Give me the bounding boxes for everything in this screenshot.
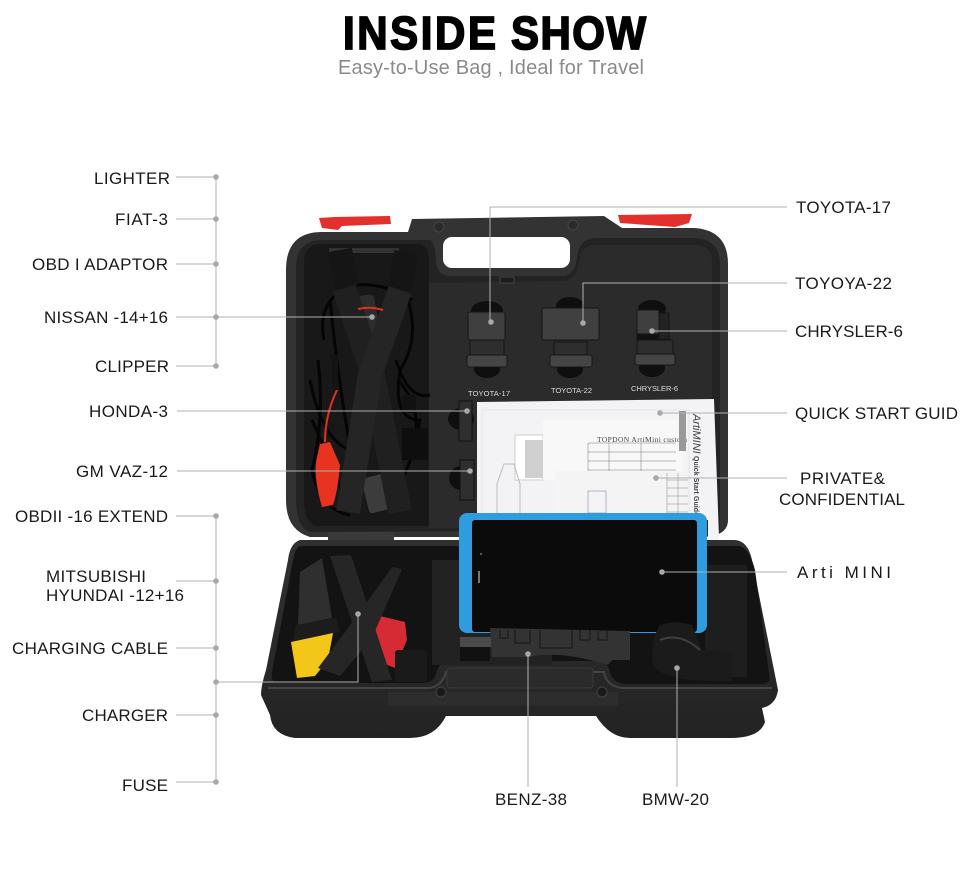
quick start guide paper: ArtiMINI (690, 413, 702, 454)
case lid (286, 214, 728, 570)
right labels: CONFIDENTIAL (779, 490, 905, 509)
red connector (372, 616, 407, 668)
adapter: gm vaz-12 (460, 460, 474, 500)
left labels (12, 169, 184, 795)
case base (261, 513, 778, 738)
right labels: CHRYSLER-6 (795, 322, 903, 341)
foam labels: TOYOTA-17 (468, 389, 510, 398)
left labels: CLIPPER (95, 357, 169, 376)
red latches (319, 216, 391, 230)
left labels: NISSAN -14+16 (44, 308, 168, 327)
adapter: chrysler-6 (635, 310, 675, 365)
toolkit case photo (261, 214, 778, 738)
foam labels: CHRYSLER-6 (631, 384, 678, 393)
cables (310, 285, 430, 515)
left labels: FIAT-3 (115, 210, 168, 229)
base straps (318, 555, 402, 682)
left labels: HONDA-3 (89, 402, 168, 421)
left labels: FUSE (122, 776, 168, 795)
adapter: toyota-22 (542, 308, 599, 367)
bottom labels: BENZ-38 (495, 790, 567, 809)
left labels: OBDII -16 EXTEND (15, 507, 168, 526)
yellow connector and cable (291, 558, 340, 678)
left labels: CHARGER (82, 706, 168, 725)
left labels: OBD I ADAPTOR (32, 255, 168, 274)
leader lines (176, 177, 787, 787)
title (343, 8, 646, 59)
quick start guide paper (477, 399, 720, 570)
tablet (459, 513, 707, 633)
velcro straps (340, 250, 406, 512)
right labels (779, 198, 958, 582)
left labels: HYUNDAI -12+16 (46, 586, 184, 605)
right labels: QUICK START GUID (795, 404, 958, 423)
bottom labels: BMW-20 (642, 790, 709, 809)
subtitle: Easy-to-Use Bag , Ideal for Travel (338, 57, 644, 79)
scanner handle (460, 628, 630, 665)
adapter: honda-3 (459, 401, 472, 441)
left labels: CHARGING CABLE (12, 639, 168, 658)
quick start guide paper: Quick Start Guide (692, 456, 699, 516)
left labels: GM VAZ-12 (76, 462, 168, 481)
left labels: LIGHTER (94, 169, 170, 188)
right labels: TOYOTA-17 (796, 198, 891, 217)
right labels: TOYOYA-22 (795, 274, 892, 293)
foam labels: TOYOTA-22 (551, 386, 592, 395)
right labels: Arti MINI (797, 563, 891, 582)
quick start guide paper: TOPDON ArtiMini custom (597, 435, 687, 444)
bmw adapter (652, 622, 732, 682)
foam labels (468, 384, 678, 398)
title: SHOW (511, 8, 646, 59)
adapter: toyota-17 (467, 312, 507, 367)
title: INSIDE (343, 8, 496, 59)
left labels: MITSUBISHI (46, 567, 146, 586)
red clip (325, 390, 337, 442)
adapter holes (448, 297, 666, 490)
leader dots (213, 174, 680, 785)
bottom labels (495, 790, 709, 809)
right labels: PRIVATE& (800, 469, 886, 488)
